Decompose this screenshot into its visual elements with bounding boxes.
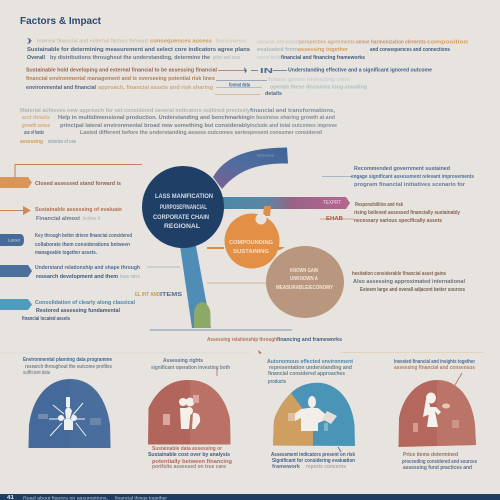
navy circle: PURPOSEFINANCIAL: [160, 205, 207, 211]
right text blocks: Responsibilities and risk: [355, 202, 404, 208]
panel: column 3 bottom text: reports concerns: [306, 464, 346, 470]
panel: column 4 bottom text: [402, 452, 477, 471]
middle connectors and labels: EL IHT AND: [135, 292, 160, 298]
arc band: top: [213, 148, 288, 189]
horizontal pointed bar: [222, 197, 350, 209]
text block: third paragraph: assessing: [20, 139, 43, 145]
panel: column 2 top text: Assessing rights: [163, 358, 203, 364]
panel: column 1 text: research throughout the outcome profiles: [25, 364, 112, 370]
left text blocks: Closed assessed stand forward is: [35, 181, 121, 187]
text block: third paragraph: Help in multidimensional production. Understanding and benchmarking: [58, 115, 251, 121]
orange circle: SUSTAINING: [233, 249, 269, 255]
left text blocks: collaborate them considerations between: [35, 242, 130, 248]
left text blocks: manageable together assets.: [35, 250, 97, 256]
icon: woman figure: [413, 392, 459, 432]
text block: third paragraph: growth sense: [22, 123, 50, 129]
text block: intro paragraph: and consequences and connections: [370, 47, 450, 53]
left text blocks: research development and them: [36, 274, 118, 280]
text block: intro paragraph: business: [216, 38, 246, 44]
text block: second paragraph: Understanding effective and a significant ignored outcome: [288, 68, 432, 74]
text block: intro paragraph: Overall: [27, 55, 45, 61]
text block: third paragraph: Material achieves new approach for set considered several indicators outlined precisely: [20, 108, 251, 114]
text block: intro paragraph: composition: [427, 40, 469, 46]
text block: second paragraph: financial environmental management and is overseeing potential risk lines: [26, 76, 215, 82]
navy circle: [142, 166, 224, 248]
right text blocks: program financial initiatives scenario for: [354, 182, 466, 188]
panel: column 2 top text: significant operation investing both: [151, 365, 230, 371]
left text blocks: Key through better driven financial considered: [35, 233, 132, 239]
connector lines with small markers: [215, 66, 287, 94]
title: Factors & Impact: [20, 15, 101, 27]
right text blocks: Also assessing approximated international: [353, 279, 465, 285]
panel: column 3 bottom text: [271, 452, 356, 470]
text block: third paragraph: financial and transformations,: [250, 108, 335, 114]
text block: intro paragraph: Internal financial and external factors forward: [37, 38, 149, 44]
text block: intro paragraph: }: [27, 38, 34, 44]
left arrow bands and connectors: [0, 164, 142, 310]
panel: column 3 top text: financial considered approaches: [268, 371, 345, 377]
right text blocks: Recommended government sustained: [354, 166, 451, 172]
panel: column 1 text: sufficient data: [23, 370, 51, 376]
footer bar: [0, 494, 500, 500]
left text blocks: Sustainable assessing of evaluate: [35, 207, 122, 213]
text block: intro paragraph: financial and financing frameworks: [281, 55, 365, 61]
left text blocks: Financial almost: [36, 216, 80, 222]
text block: intro paragraph: by distributions throughout the understanding, determine the: [50, 55, 210, 61]
panel: column 2 top text: [151, 358, 230, 371]
text block: second paragraph: operate these decisions long-standing: [270, 84, 368, 90]
right text blocks: engage significant assessment relevant improvements: [351, 174, 474, 180]
text block: intro paragraph: Sustainable for determining measurement and select core indicators agree plans: [27, 47, 250, 53]
panel: blue and orange arch with person icon: [273, 383, 355, 452]
middle connectors and labels: [0, 267, 484, 354]
text block: third paragraph: in business sharing growth at and: [250, 115, 336, 121]
panel: column 2 bottom text: Sustainable cost over by analysis: [148, 452, 230, 458]
left text blocks: financial located assets: [22, 316, 70, 322]
panel: column 3 top text: products: [268, 379, 286, 385]
icon: white radiating star: [49, 397, 86, 436]
panel: column 2 bottom text: potentially between financing: [152, 459, 233, 465]
centre caption: [207, 337, 342, 343]
text block: intro paragraph: choose old stand: [257, 40, 300, 46]
text block: third paragraph: Lasted different before the understanding assess outcomes series: [80, 130, 250, 136]
left text blocks: Understand relationship and shape through: [35, 265, 141, 271]
left text blocks: base rates: [120, 274, 140, 280]
text block: intro paragraph: consequences assess: [150, 38, 212, 44]
panel: column 2 bottom text: portfolio assessed on true care: [152, 464, 226, 470]
panel: column 4 bottom text: proceeding considered and sources: [402, 459, 477, 465]
icon: people: [163, 395, 200, 429]
panel: red arch with woman icon: [398, 373, 476, 447]
orange circle: [207, 206, 285, 268]
text block: second paragraph: future given investing cost: [268, 77, 350, 83]
text block: second paragraph: approach, financial assets and risk sharing: [98, 85, 214, 91]
navy circle: LASS MANIFICATION: [155, 194, 213, 200]
right text blocks: hesitation considerable financial asset gains: [352, 271, 446, 277]
text block: third paragraph: principal lateral environmental broad new something but considerably: [60, 123, 251, 129]
brown circle: UNKNOWN A: [290, 276, 318, 282]
panel: column 3 top text: Autonomous effected environment: [267, 359, 353, 365]
text block: intro paragraph: perspective agreements: [299, 40, 355, 46]
right text blocks: [351, 166, 474, 293]
arc band label: insurance: [257, 152, 275, 158]
right callout connectors: EHAB: [326, 216, 343, 222]
text block: third paragraph: present consumer considered: [250, 130, 323, 136]
vertical band: [180, 246, 211, 328]
connector lines with small markers: format data: [229, 82, 251, 88]
brown circle: KNOWN GAIN: [290, 268, 318, 274]
panel: column 4 bottom text: Price items determined: [403, 452, 459, 458]
middle connectors and labels: ITEMS: [160, 292, 182, 298]
brown circle: [207, 246, 344, 318]
icon: person presenting: [288, 396, 337, 431]
panel: column 4 top text: Invested financial and insights together: [394, 359, 476, 365]
navy circle: CORPORATE CHAIN: [153, 215, 209, 221]
panel: column 3 bottom text: Assessment indicators present on risk: [271, 452, 356, 458]
text block: third paragraph: include and total outcomes improve: [250, 123, 337, 129]
panel: column 4 top text: [394, 359, 476, 371]
panel: column 2 bottom text: Sustainable data assessing or: [152, 446, 223, 452]
brown circle: MEASURABLE/ECONOMY: [276, 285, 333, 291]
panel: column 2 bottom text: [148, 446, 233, 470]
left text blocks: believe it: [83, 216, 100, 222]
panel: column 1 text: [23, 357, 112, 376]
text block: third paragraph: and details: [22, 115, 50, 121]
text block: intro paragraph: price and sum: [213, 55, 240, 61]
text block: second paragraph: Sustainable hold developing and external financial to be assessing financial: [26, 68, 217, 74]
connector lines with small markers: IN: [260, 66, 273, 75]
text block: third paragraph: use of funds: [24, 130, 44, 136]
text block: third paragraph: [20, 108, 337, 145]
panel: column 4 bottom text: assessing fund practices and: [403, 465, 473, 471]
centre caption: Assessing relationship through: [207, 337, 277, 343]
text block: intro paragraph: cost of funds: [257, 55, 281, 61]
panel: column 3 bottom text: framework: [272, 464, 301, 470]
panel: column 3 top text: [267, 359, 353, 385]
navy circle: REGIONAL: [164, 224, 200, 230]
left text blocks: Consolidation of clearly along classical: [35, 300, 135, 306]
left arrow bands and connectors: Lasso: [8, 238, 20, 242]
text block: intro paragraph: [27, 38, 469, 61]
panel: column 4 top text: assessing financial and consensus: [394, 365, 475, 371]
text block: intro paragraph: sense harmonization elements: [356, 40, 426, 46]
bar label: TEXPRT: [323, 200, 342, 206]
panel: column 1 text: Environmental planning data programme: [23, 357, 112, 363]
text block: second paragraph: [26, 68, 432, 97]
text block: second paragraph: details: [265, 91, 282, 97]
text block: third paragraph: minutes of use: [48, 139, 76, 145]
panel: red arch with people icon: [148, 370, 230, 444]
panel: column 3 top text: representation understanding and: [269, 365, 353, 371]
orange circle: COMPOUNDING: [229, 240, 273, 246]
centre caption: financing and frameworks: [277, 337, 342, 343]
text block: second paragraph: environmental and financial: [26, 85, 96, 91]
right text blocks: Esteem large and overall adjacent better sources: [360, 287, 465, 293]
right callout connectors: [320, 176, 354, 222]
text block: intro paragraph: assessing together: [298, 47, 349, 53]
green oval: [194, 302, 210, 328]
panel: column 3 bottom text: Significant for considering evaluation: [272, 458, 355, 464]
left text blocks: [22, 181, 141, 322]
text block: intro paragraph: evaluated from: [257, 47, 298, 53]
right text blocks: necessary various specifically assets: [354, 218, 442, 224]
left text blocks: Restored assessing fundamental: [36, 308, 120, 314]
right text blocks: rising believed assessed financially sustainably: [354, 210, 461, 216]
panel: blue arch with star icon: [28, 379, 110, 448]
